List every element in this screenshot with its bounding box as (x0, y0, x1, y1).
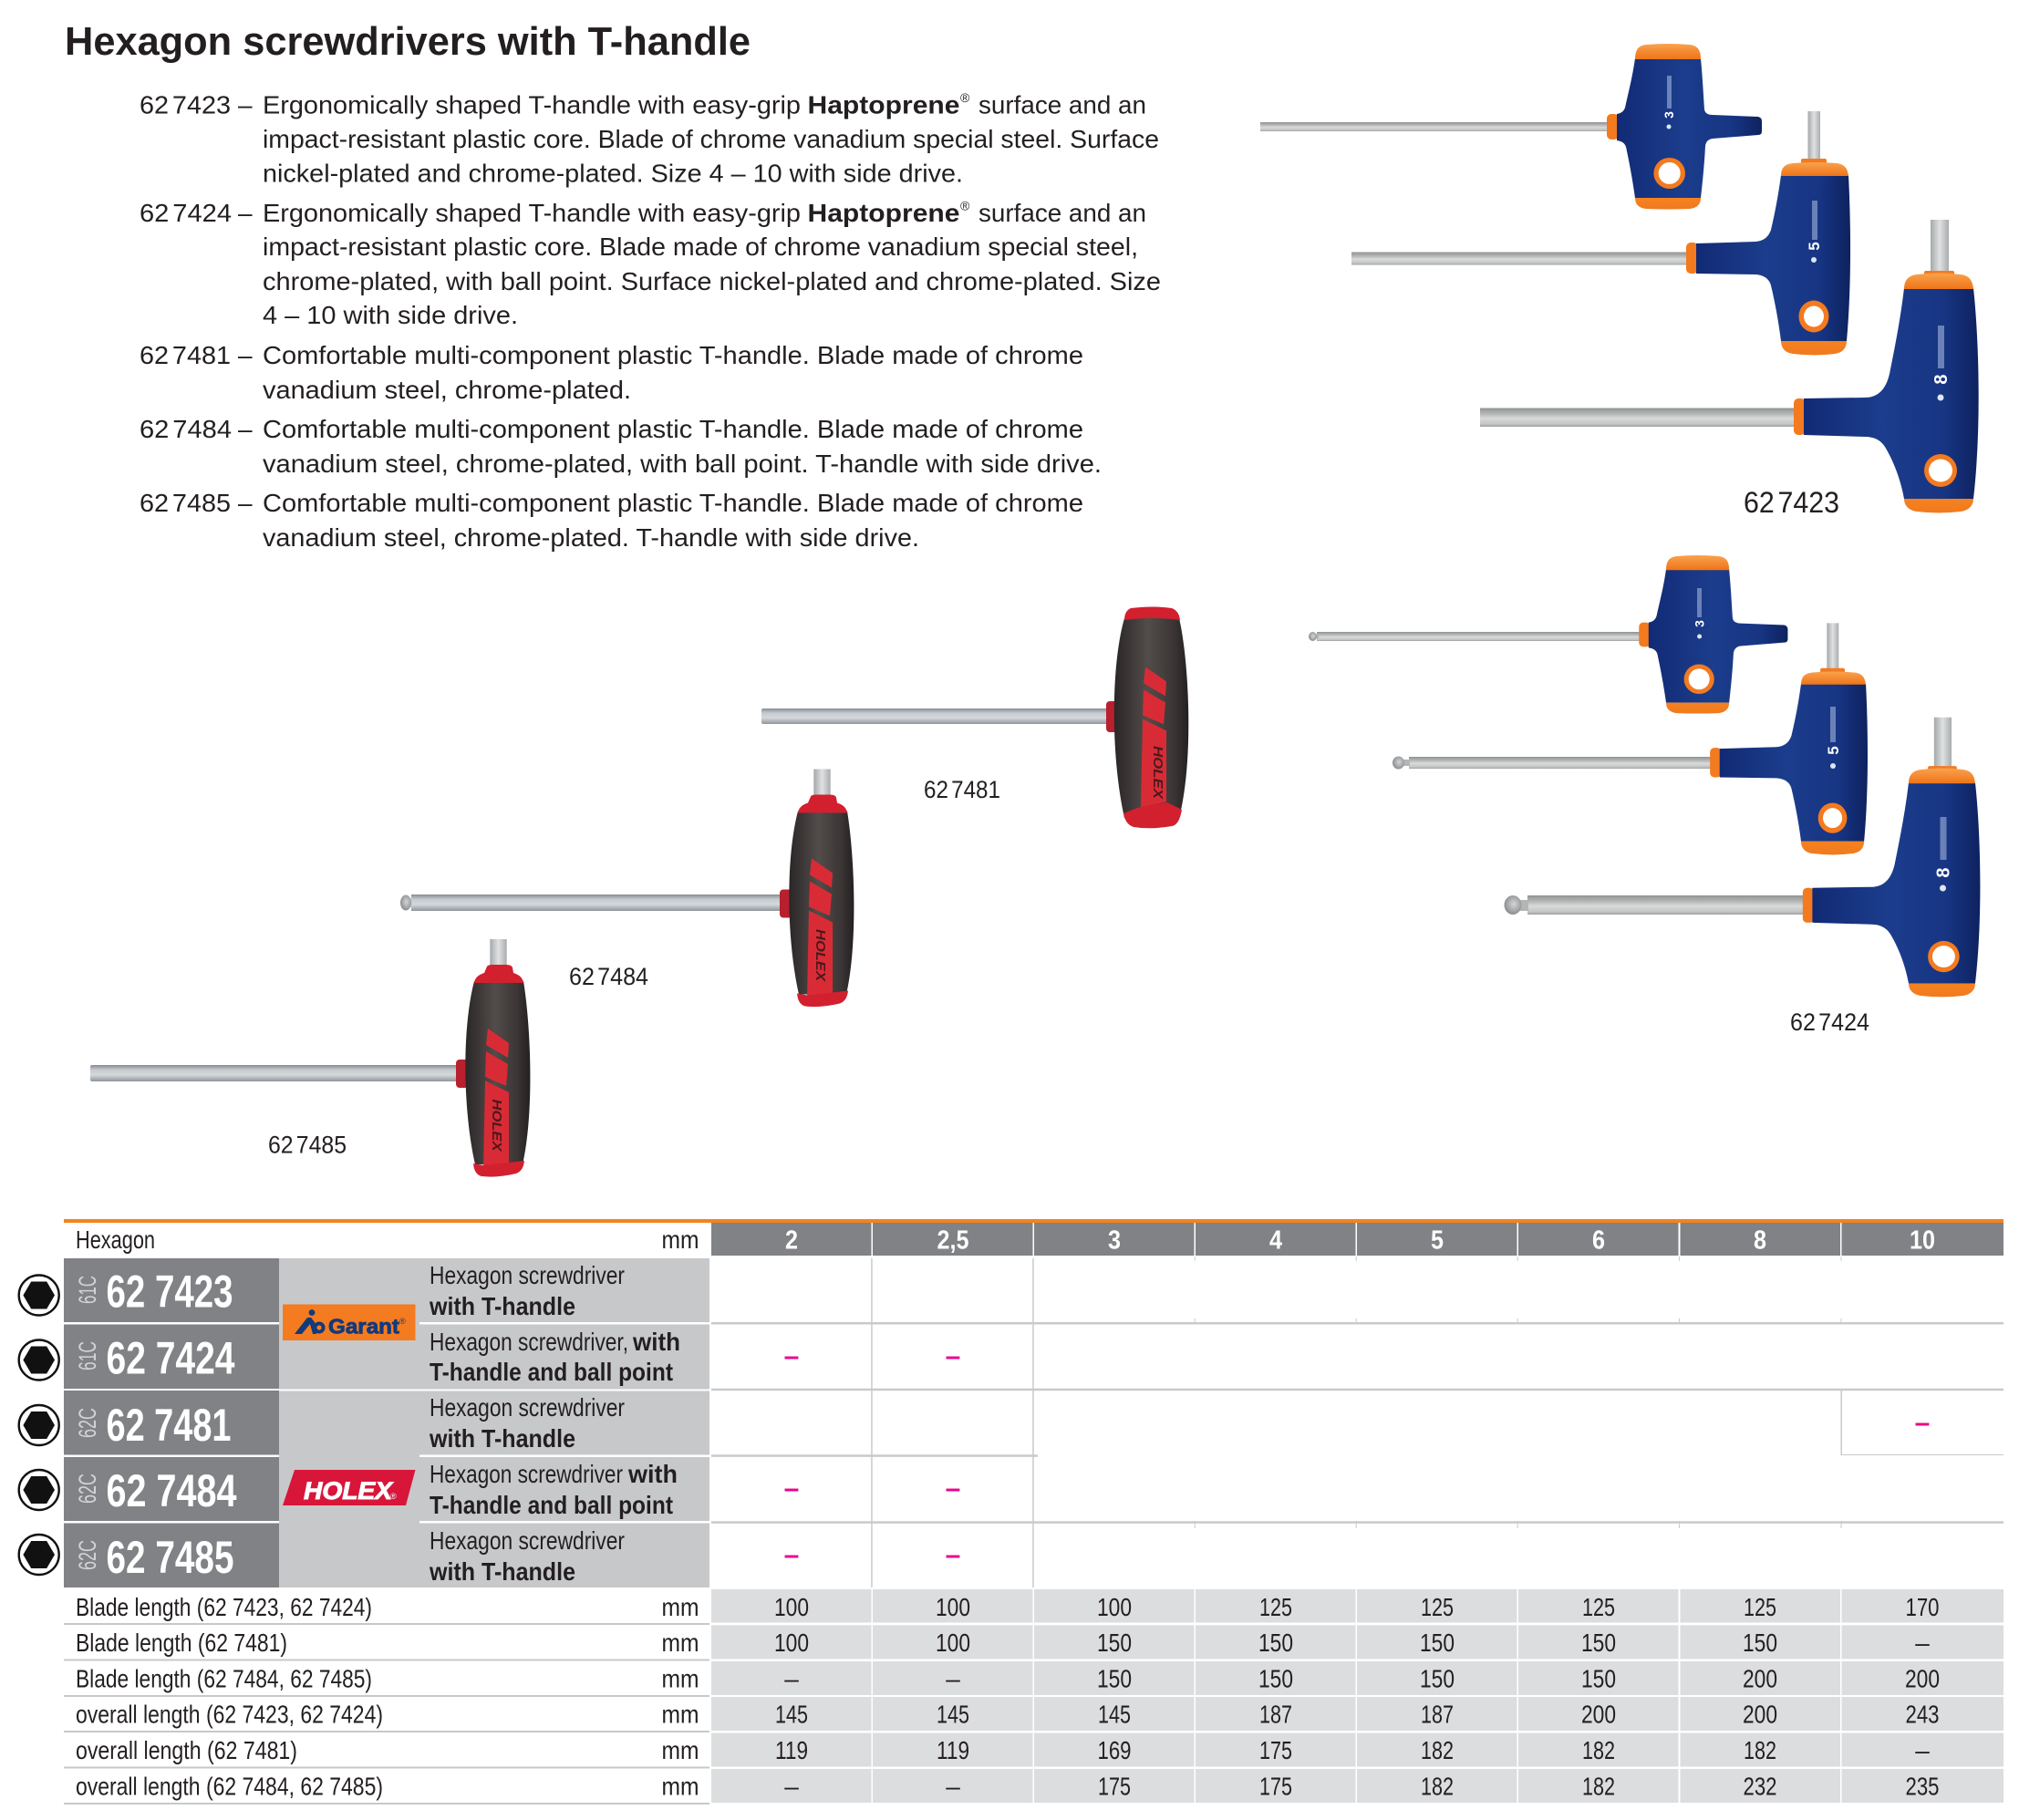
description 62 7423: nickel-plated and chrome-plated. Size 4 – 10 with side drive. (263, 159, 963, 188)
description 62 7423: – (238, 91, 253, 119)
data row: overall length (62 7481): 182 (1421, 1736, 1454, 1764)
table header row: 10 (1910, 1225, 1935, 1255)
data row: overall length (62 7481): 182 (1582, 1736, 1615, 1764)
label 62 7484: 62 7484 (569, 963, 648, 990)
icon: hexagon socket (19, 1340, 59, 1381)
icon: hexagon socket (19, 1275, 59, 1315)
data row: Blade length (62 7484, 62 7485): 150 (1420, 1665, 1455, 1692)
icon: hexagon socket (19, 1405, 59, 1445)
data row: overall length (62 7423, 62 7424): 200 (1581, 1701, 1616, 1729)
data row: overall length (62 7484, 62 7485): 182 (1421, 1773, 1454, 1800)
row 62 7424: 62 7424 (106, 1333, 235, 1384)
data row: Blade length (62 7481): – (1915, 1629, 1930, 1657)
row 62 7424: Hexagon screwdriver, (430, 1328, 628, 1356)
description 62 7423: Ergonomically shaped T-handle with easy-grip (263, 91, 801, 119)
data row: overall length (62 7481): – (1915, 1736, 1930, 1764)
data row: overall length (62 7423, 62 7424): 145 (937, 1701, 969, 1729)
text block: product descriptions (140, 90, 1161, 552)
not available marks: – (946, 1540, 960, 1570)
data row: Blade length (62 7423, 62 7424): 125 (1744, 1593, 1776, 1621)
product photo: screwdriver 62 7485: HOLEX (489, 1099, 504, 1153)
row lines of dimension table (64, 1623, 709, 1804)
data row: Blade length (62 7481): 100 (774, 1629, 809, 1657)
description 62 7485: – (238, 489, 253, 517)
data row: Blade length (62 7481): Blade length (62 7481) (76, 1629, 287, 1657)
row 62 7481: Hexagon screwdriver (430, 1393, 625, 1422)
row 62 7481 (19, 1391, 625, 1455)
data row: Blade length (62 7484, 62 7485): 150 (1097, 1665, 1132, 1692)
row 62 7423: 62 7423 (106, 1266, 233, 1317)
data row: Blade length (62 7481): 150 (1097, 1629, 1132, 1657)
description 62 7481: 62 7481 (140, 341, 231, 369)
product photo: screwdriver 62 7481 (761, 607, 1188, 828)
screwdriver 7424 size 8 (1505, 718, 1980, 997)
data row: Blade length (62 7481): mm (662, 1629, 699, 1657)
data row: Blade length (62 7484, 62 7485): 200 (1905, 1665, 1940, 1692)
description 62 7484: vanadium steel, chrome-plated, with ball point. T-handle with side drive. (263, 450, 1102, 478)
data row: Blade length (62 7481) (76, 1625, 2003, 1659)
data row: overall length (62 7423, 62 7424): 187 (1259, 1701, 1292, 1729)
table header row: 2 (785, 1225, 798, 1255)
data row: Blade length (62 7423, 62 7424): Blade length (62 7423, 62 7424) (76, 1593, 372, 1621)
row 62 7484: 62 7484 (106, 1465, 237, 1516)
data row: overall length (62 7481): overall length (62 7481) (76, 1736, 297, 1764)
not available marks: – (946, 1341, 960, 1371)
icon: hexagon socket (19, 1535, 59, 1575)
data row: overall length (62 7481): 119 (775, 1736, 808, 1764)
data row: overall length (62 7423, 62 7424): 243 (1906, 1701, 1939, 1729)
product photo group: 62 7424 ball point screwdrivers (1309, 555, 1980, 1036)
table header row (76, 1223, 2003, 1256)
row 62 7484: Hexagon screwdriver (430, 1460, 623, 1488)
description 62 7484: 62 7484 (140, 415, 232, 443)
brand column background (279, 1258, 709, 1587)
data row: Blade length (62 7481): 150 (1743, 1629, 1777, 1657)
table header row: Hexagon (76, 1225, 155, 1254)
data row: Blade length (62 7481): 150 (1420, 1629, 1455, 1657)
row 62 7485: with T-handle (429, 1557, 575, 1586)
screwdriver 7424 size 8: 8 (1933, 867, 1953, 878)
description 62 7485: Comfortable multi-component plastic T-handle. Blade made of chrome (263, 489, 1083, 517)
data row: overall length (62 7484, 62 7485): mm (662, 1773, 699, 1800)
data row: Blade length (62 7423, 62 7424): 100 (1097, 1593, 1132, 1621)
data row: overall length (62 7423, 62 7424): mm (662, 1701, 699, 1729)
data row: overall length (62 7423, 62 7424) (76, 1697, 2003, 1731)
data row: overall length (62 7484, 62 7485): 175 (1259, 1773, 1292, 1800)
data row: overall length (62 7481) (76, 1732, 2003, 1767)
not available marks: – (784, 1341, 799, 1371)
data row: overall length (62 7481): mm (662, 1736, 699, 1764)
data row: overall length (62 7423, 62 7424): 145 (775, 1701, 808, 1729)
screwdriver 7423 size 5: 5 (1806, 242, 1823, 251)
screwdriver 7424 size 3 (1309, 555, 1787, 714)
icon: hexagon socket (19, 1470, 59, 1510)
title: Hexagon screwdrivers with T-handle (65, 19, 751, 64)
not available marks: – (1915, 1408, 1930, 1438)
label 62 7485: 62 7485 (268, 1131, 347, 1158)
data row: overall length (62 7484, 62 7485): 235 (1906, 1773, 1939, 1800)
description 62 7481 (140, 341, 1083, 404)
description 62 7423 (140, 90, 1159, 188)
product photo group: 62 7423 screwdrivers (1260, 44, 1979, 519)
screwdriver 7423 size 5 (1351, 111, 1850, 356)
data row: Blade length (62 7481): 150 (1258, 1629, 1293, 1657)
row 62 7424: 61C (74, 1341, 101, 1370)
not available marks: – (784, 1474, 799, 1504)
description 62 7423: ® (960, 90, 970, 105)
data row: Blade length (62 7423, 62 7424): 125 (1582, 1593, 1615, 1621)
description 62 7485 (140, 489, 1083, 552)
data row: Blade length (62 7423, 62 7424): 125 (1421, 1593, 1454, 1621)
description 62 7424: Ergonomically shaped T-handle with easy-grip (263, 199, 801, 227)
data row: Blade length (62 7484, 62 7485) (76, 1661, 2003, 1695)
data row: Blade length (62 7484, 62 7485): mm (662, 1665, 699, 1692)
data row: Blade length (62 7484, 62 7485): – (946, 1665, 960, 1692)
product photo: screwdriver 62 7481: HOLEX (1150, 746, 1165, 800)
row 62 7485: 62 7485 (106, 1532, 233, 1583)
screwdriver 7424 size 3: 3 (1693, 620, 1707, 627)
data row: Blade length (62 7423, 62 7424): 100 (774, 1593, 809, 1621)
data row: overall length (62 7481): 175 (1259, 1736, 1292, 1764)
data row: Blade length (62 7423, 62 7424): mm (662, 1593, 699, 1621)
row 62 7481: 62 7481 (106, 1400, 232, 1451)
screwdriver 7424 size 5: 5 (1825, 746, 1842, 755)
row 62 7484: T-handle and ball point (430, 1491, 673, 1519)
table header row: 2,5 (937, 1225, 968, 1255)
data row: overall length (62 7484, 62 7485): – (946, 1773, 960, 1800)
description 62 7423: surface and an (978, 91, 1146, 119)
description 62 7424: 4 – 10 with side drive. (263, 301, 518, 329)
data row: Blade length (62 7484, 62 7485): 150 (1258, 1665, 1293, 1692)
description 62 7424: ® (960, 199, 970, 213)
screwdriver 7423 size 8: 8 (1931, 374, 1952, 385)
data row: overall length (62 7484, 62 7485): 232 (1744, 1773, 1776, 1800)
description 62 7423: impact-resistant plastic core. Blade of chrome vanadium special steel. Surface (263, 125, 1159, 153)
data row: overall length (62 7484, 62 7485): 182 (1582, 1773, 1615, 1800)
description 62 7424: chrome-plated, with ball point. Surface nickel-plated and chrome-plated. Size (263, 267, 1161, 295)
table header row: 8 (1754, 1225, 1766, 1255)
data row: overall length (62 7423, 62 7424): 200 (1743, 1701, 1777, 1729)
description 62 7481: vanadium steel, chrome-plated. (263, 376, 631, 404)
data row: overall length (62 7481): 169 (1098, 1736, 1131, 1764)
description 62 7481: – (238, 341, 253, 369)
row 62 7484 (19, 1457, 678, 1521)
data row: Blade length (62 7481): 100 (936, 1629, 970, 1657)
logo: Garant: ® (399, 1317, 406, 1326)
logo: HOLEX (283, 1470, 416, 1505)
table header row: mm (662, 1225, 699, 1254)
row 62 7485: Hexagon screwdriver (430, 1526, 625, 1555)
product photo: screwdriver 62 7484: HOLEX (813, 929, 828, 982)
product photo: screwdriver 62 7484 (400, 770, 854, 1007)
not available marks: – (784, 1540, 799, 1570)
data row: Blade length (62 7484, 62 7485): 200 (1743, 1665, 1777, 1692)
logo: HOLEX: ® (390, 1492, 397, 1501)
data row: overall length (62 7423, 62 7424): 145 (1098, 1701, 1131, 1729)
data row: overall length (62 7484, 62 7485): 175 (1098, 1773, 1131, 1800)
row 62 7423: 61C (74, 1276, 101, 1304)
availability grid (711, 1256, 2003, 1587)
row 62 7484: 62C (74, 1474, 101, 1504)
table header row: 3 (1108, 1225, 1121, 1255)
description 62 7424 (140, 199, 1161, 329)
logo: Garant: Garant (328, 1315, 399, 1339)
description 62 7485: 62 7485 (140, 489, 231, 517)
row 62 7481: with T-handle (429, 1424, 575, 1453)
data row: overall length (62 7481): 182 (1744, 1736, 1776, 1764)
data row: Blade length (62 7481): 150 (1581, 1629, 1616, 1657)
description 62 7484: – (238, 415, 253, 443)
row 62 7424 (19, 1324, 680, 1389)
screwdriver 7423 size 3: 3 (1662, 111, 1676, 119)
table header row: 4 (1269, 1225, 1282, 1255)
table (19, 1219, 2003, 1804)
data row: Blade length (62 7423, 62 7424): 170 (1906, 1593, 1939, 1621)
not available marks: – (946, 1474, 960, 1504)
description 62 7484 (140, 415, 1102, 478)
data row: overall length (62 7484, 62 7485): – (784, 1773, 799, 1800)
data row: overall length (62 7481): 119 (937, 1736, 969, 1764)
description 62 7424: surface and an (978, 199, 1146, 227)
data row: overall length (62 7423, 62 7424): 187 (1421, 1701, 1454, 1729)
not available marks (784, 1341, 1930, 1570)
description 62 7485: vanadium steel, chrome-plated. T-handle with side drive. (263, 523, 919, 552)
row 62 7423: with T-handle (429, 1292, 575, 1320)
data row: Blade length (62 7423, 62 7424) (76, 1589, 2003, 1623)
row 62 7424: T-handle and ball point (430, 1358, 673, 1386)
logo: HOLEX: HOLEX (304, 1477, 394, 1505)
description 62 7423: 62 7423 (140, 91, 231, 119)
label 62 7423: 62 7423 (1744, 486, 1839, 519)
description 62 7481: Comfortable multi-component plastic T-handle. Blade made of chrome (263, 341, 1083, 369)
product photo: screwdriver 62 7485 (90, 939, 530, 1177)
row 62 7423: Hexagon screwdriver (430, 1261, 625, 1289)
data row: overall length (62 7484, 62 7485) (76, 1769, 2003, 1803)
row 62 7424: with (632, 1328, 680, 1356)
data row: Blade length (62 7484, 62 7485): 150 (1581, 1665, 1616, 1692)
data row: Blade length (62 7423, 62 7424): 100 (936, 1593, 970, 1621)
table header row: 5 (1431, 1225, 1444, 1255)
description 62 7424: – (238, 199, 253, 227)
row 62 7423 (19, 1258, 625, 1322)
logo: Garant (283, 1304, 416, 1340)
data row: overall length (62 7423, 62 7424): overall length (62 7423, 62 7424) (76, 1701, 383, 1729)
screwdriver 7423 size 3 (1260, 44, 1762, 210)
row 62 7484: with (627, 1460, 678, 1488)
data row: Blade length (62 7484, 62 7485): Blade length (62 7484, 62 7485) (76, 1665, 372, 1692)
data row: Blade length (62 7423, 62 7424): 125 (1259, 1593, 1292, 1621)
label 62 7481: 62 7481 (924, 776, 1000, 803)
row 62 7485: 62C (74, 1540, 101, 1570)
row 62 7481: 62C (74, 1408, 101, 1438)
screwdriver 7423 size 8 (1480, 220, 1979, 512)
row 62 7485 (19, 1523, 625, 1587)
data row: overall length (62 7484, 62 7485): overall length (62 7484, 62 7485) (76, 1773, 383, 1800)
description 62 7424: 62 7424 (140, 199, 232, 227)
description 62 7423: Haptoprene (808, 91, 959, 119)
description 62 7424: Haptoprene (808, 199, 959, 227)
table header row: 6 (1592, 1225, 1605, 1255)
screwdriver 7424 size 5 (1393, 623, 1868, 854)
label 62 7424: 62 7424 (1790, 1008, 1869, 1036)
data row: Blade length (62 7484, 62 7485): – (784, 1665, 799, 1692)
description 62 7424: impact-resistant plastic core. Blade made of chrome vanadium special steel, (263, 233, 1138, 261)
description 62 7484: Comfortable multi-component plastic T-handle. Blade made of chrome (263, 415, 1083, 443)
